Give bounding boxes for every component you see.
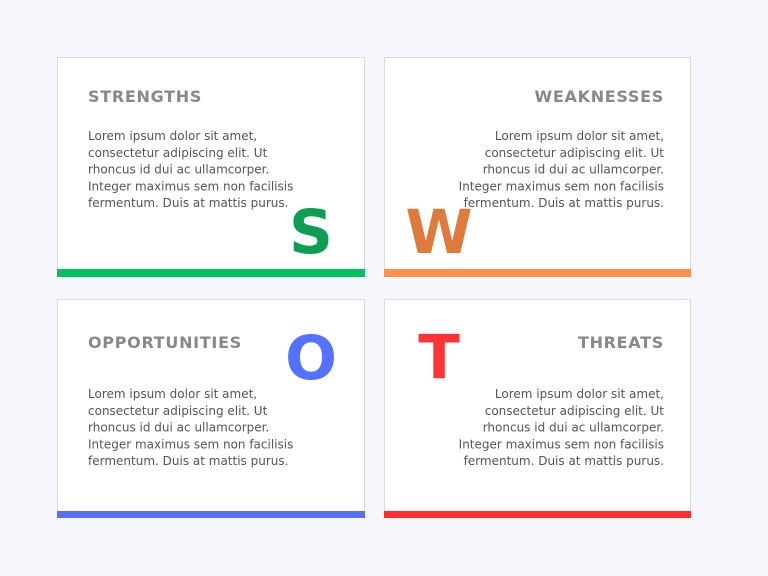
text: strengths body: rhoncus id dui ac ullamcorper. [88, 163, 269, 177]
text: opportunities body: consectetur adipiscing elit. Ut [88, 404, 268, 418]
text: threats body: rhoncus id dui ac ullamcorper. [483, 421, 664, 435]
text: strengths body: Lorem ipsum dolor sit amet, [88, 129, 257, 143]
text: weaknesses body: consectetur adipiscing elit. Ut [485, 146, 664, 160]
letter: S: S [289, 197, 333, 268]
panel: weaknesses [384, 58, 691, 277]
text: weaknesses body: Integer maximus sem non facilisis [459, 179, 664, 193]
bar: green [57, 269, 365, 277]
text: opportunities body: rhoncus id dui ac ullamcorper. [88, 421, 269, 435]
bar: blue [57, 511, 365, 518]
heading: threats: THREATS [578, 333, 664, 352]
panel: threats [384, 300, 691, 518]
text: strengths body: Integer maximus sem non facilisis [88, 179, 293, 193]
text: threats body: Lorem ipsum dolor sit amet, [495, 387, 664, 401]
panel: strengths [57, 58, 365, 277]
letter: W: W [405, 197, 473, 268]
bar: orange [384, 269, 691, 277]
letter: T: T [418, 322, 460, 393]
letter: O: O [285, 323, 337, 394]
text: opportunities body: fermentum. Duis at mattis purus. [88, 454, 288, 468]
text: threats body: fermentum. Duis at mattis purus. [464, 454, 664, 468]
text: opportunities body: Integer maximus sem non facilisis [88, 437, 293, 451]
text: weaknesses body: fermentum. Duis at mattis purus. [464, 196, 664, 210]
text: weaknesses body: Lorem ipsum dolor sit amet, [495, 129, 664, 143]
text: opportunities body: Lorem ipsum dolor sit amet, [88, 387, 257, 401]
heading: opportunities: OPPORTUNITIES [88, 333, 242, 352]
heading: weaknesses: WEAKNESSES [535, 87, 664, 106]
bar: red [384, 511, 691, 518]
text: threats body: Integer maximus sem non facilisis [459, 437, 664, 451]
text: strengths body: fermentum. Duis at mattis purus. [88, 196, 288, 210]
heading: strengths: STRENGTHS [88, 87, 202, 106]
panel: opportunities [57, 300, 365, 518]
text: threats body: consectetur adipiscing elit. Ut [485, 404, 664, 418]
text: strengths body: consectetur adipiscing elit. Ut [88, 146, 268, 160]
text: weaknesses body: rhoncus id dui ac ullamcorper. [483, 163, 664, 177]
